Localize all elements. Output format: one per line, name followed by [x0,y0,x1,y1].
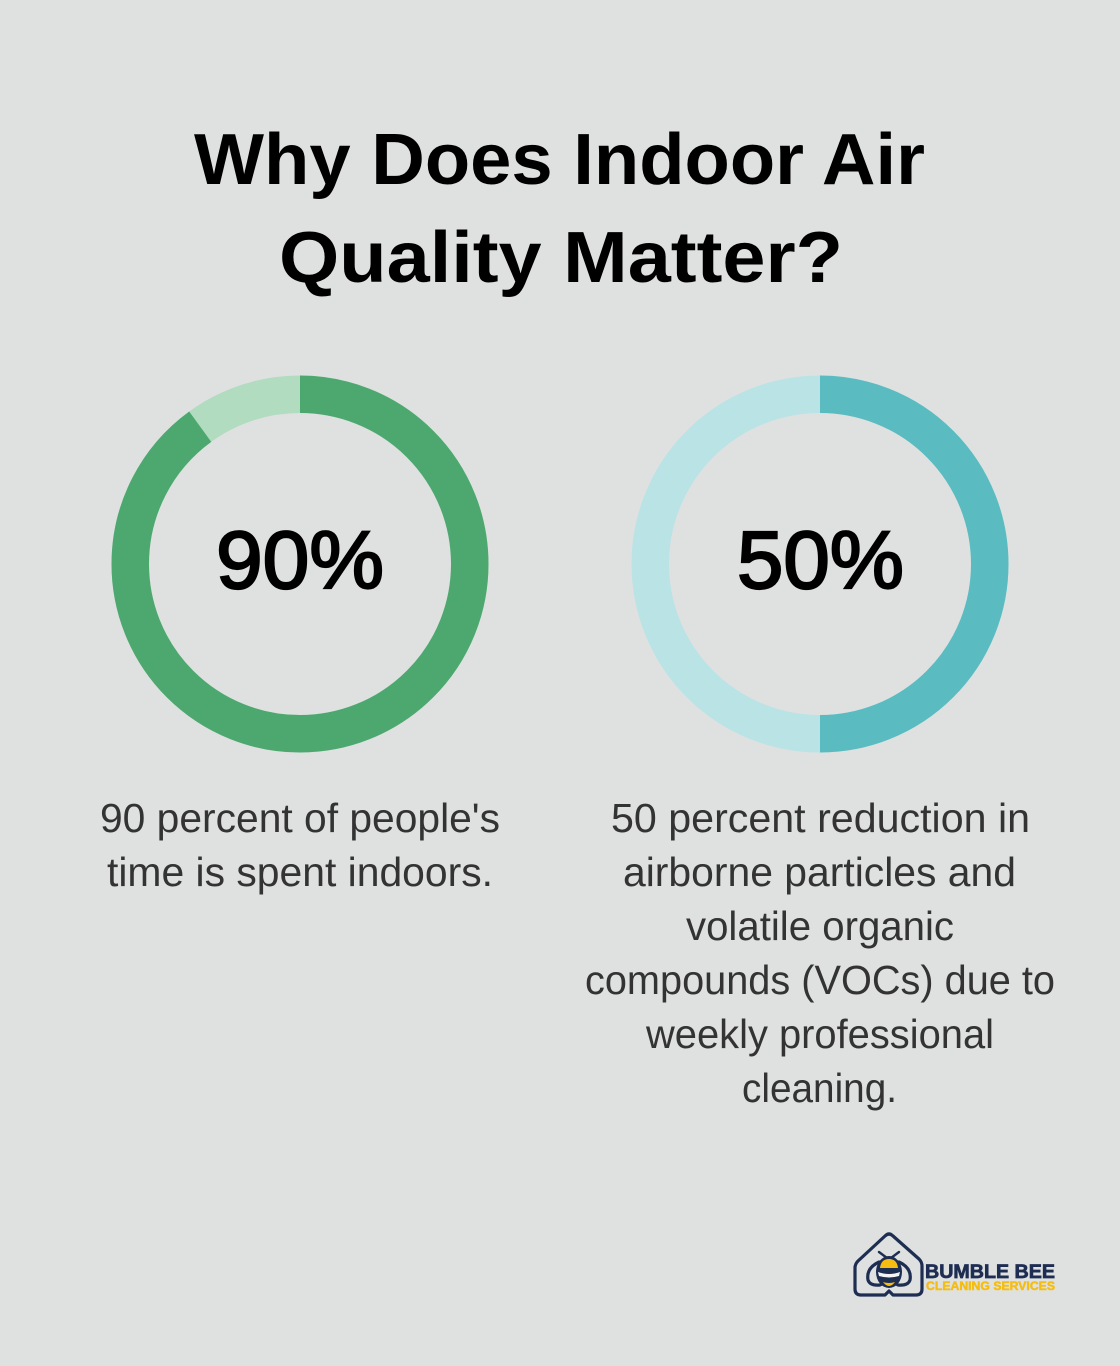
text: 50 percent description: airborne particles and [623,849,1016,895]
logo: Bumble Bee Cleaning Services [855,1234,1055,1295]
text: 50 percent description [585,795,1055,1111]
value: 50%: 50% [737,515,904,606]
text: 50 percent description: 50 percent reduction in [611,795,1030,841]
panel: 50 percent stat [585,394,1055,1111]
text: logo tagline: CLEANING SERVICES [926,1279,1055,1293]
text: 90 percent description [100,795,500,895]
value: 90%: 90% [216,515,384,606]
text: 50 percent description: weekly professional [645,1011,994,1057]
text: 50 percent description: cleaning. [742,1065,897,1111]
text: logo name: BUMBLE BEE [925,1262,1055,1283]
icon: house with bee [855,1234,922,1295]
panel: 90 percent stat [100,394,500,895]
title [194,120,925,298]
title: Quality Matter? [279,218,843,298]
chart: 90 percent donut [130,394,470,734]
text: 50 percent description: volatile organic [686,903,954,949]
text: 90 percent description: time is spent indoors. [107,849,493,895]
text: 90 percent description: 90 percent of people's [100,795,500,841]
text: 50 percent description: compounds (VOCs) due to [585,957,1055,1003]
chart: 50 percent donut [650,394,990,734]
title: Why Does Indoor Air [194,120,925,200]
